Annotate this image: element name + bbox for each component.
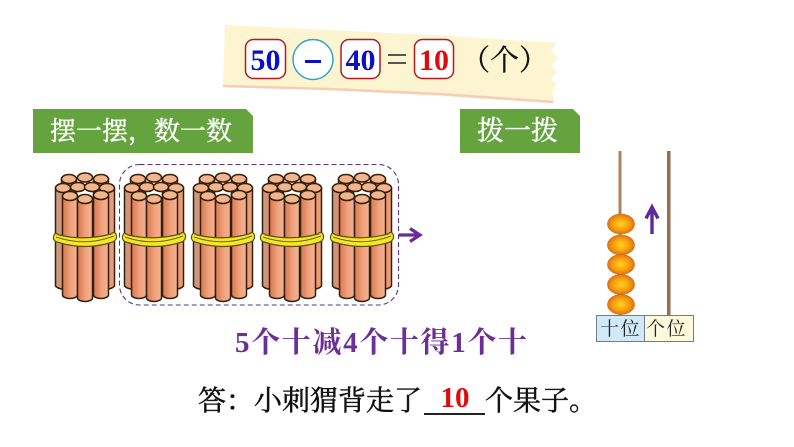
number box: 10: [414, 40, 454, 78]
banner: equation paper strip: [223, 25, 558, 103]
number box: 40: 40: [346, 44, 376, 77]
bundle 5: [330, 173, 394, 302]
place value table: [596, 316, 694, 342]
answer sentence: 个果子。: [485, 385, 597, 417]
beads: [608, 214, 634, 314]
heading: arrange and count: 摆一摆，数一数: [50, 117, 232, 146]
bundles of sticks: [53, 173, 394, 302]
answer sentence: 答：小刺猬背走了: [198, 385, 422, 417]
unit text: （个）: [461, 44, 548, 77]
heading: move beads: 拨一拨: [477, 116, 558, 146]
arrow: take away: [399, 228, 420, 242]
tens rod: [618, 151, 622, 316]
statement: 5 tens minus 4 tens: 5个十减4个十得1个十: [235, 326, 527, 359]
bundle 3: [191, 173, 255, 302]
number box: 10: 10: [419, 44, 449, 77]
bundle 1: [53, 173, 117, 302]
operator circle: minus: [293, 40, 333, 80]
ones rod: [667, 151, 670, 316]
dashed selection around four bundles: [120, 164, 398, 305]
answer sentence: 10: [440, 382, 470, 414]
heading: arrange and count: [33, 109, 253, 153]
place value table: 个位: [646, 318, 687, 340]
heading: move beads: [460, 109, 580, 153]
equals sign: [388, 54, 406, 64]
number box: 50: [246, 40, 286, 78]
bundle 2: [122, 173, 186, 302]
answer sentence: [198, 382, 597, 417]
number box: 50: 50: [250, 44, 280, 77]
abacus: [596, 151, 694, 342]
number box: 40: [341, 40, 380, 78]
place value table: 十位: [600, 318, 641, 340]
arrow: bead up: [646, 207, 658, 234]
bundle 4: [260, 173, 324, 302]
